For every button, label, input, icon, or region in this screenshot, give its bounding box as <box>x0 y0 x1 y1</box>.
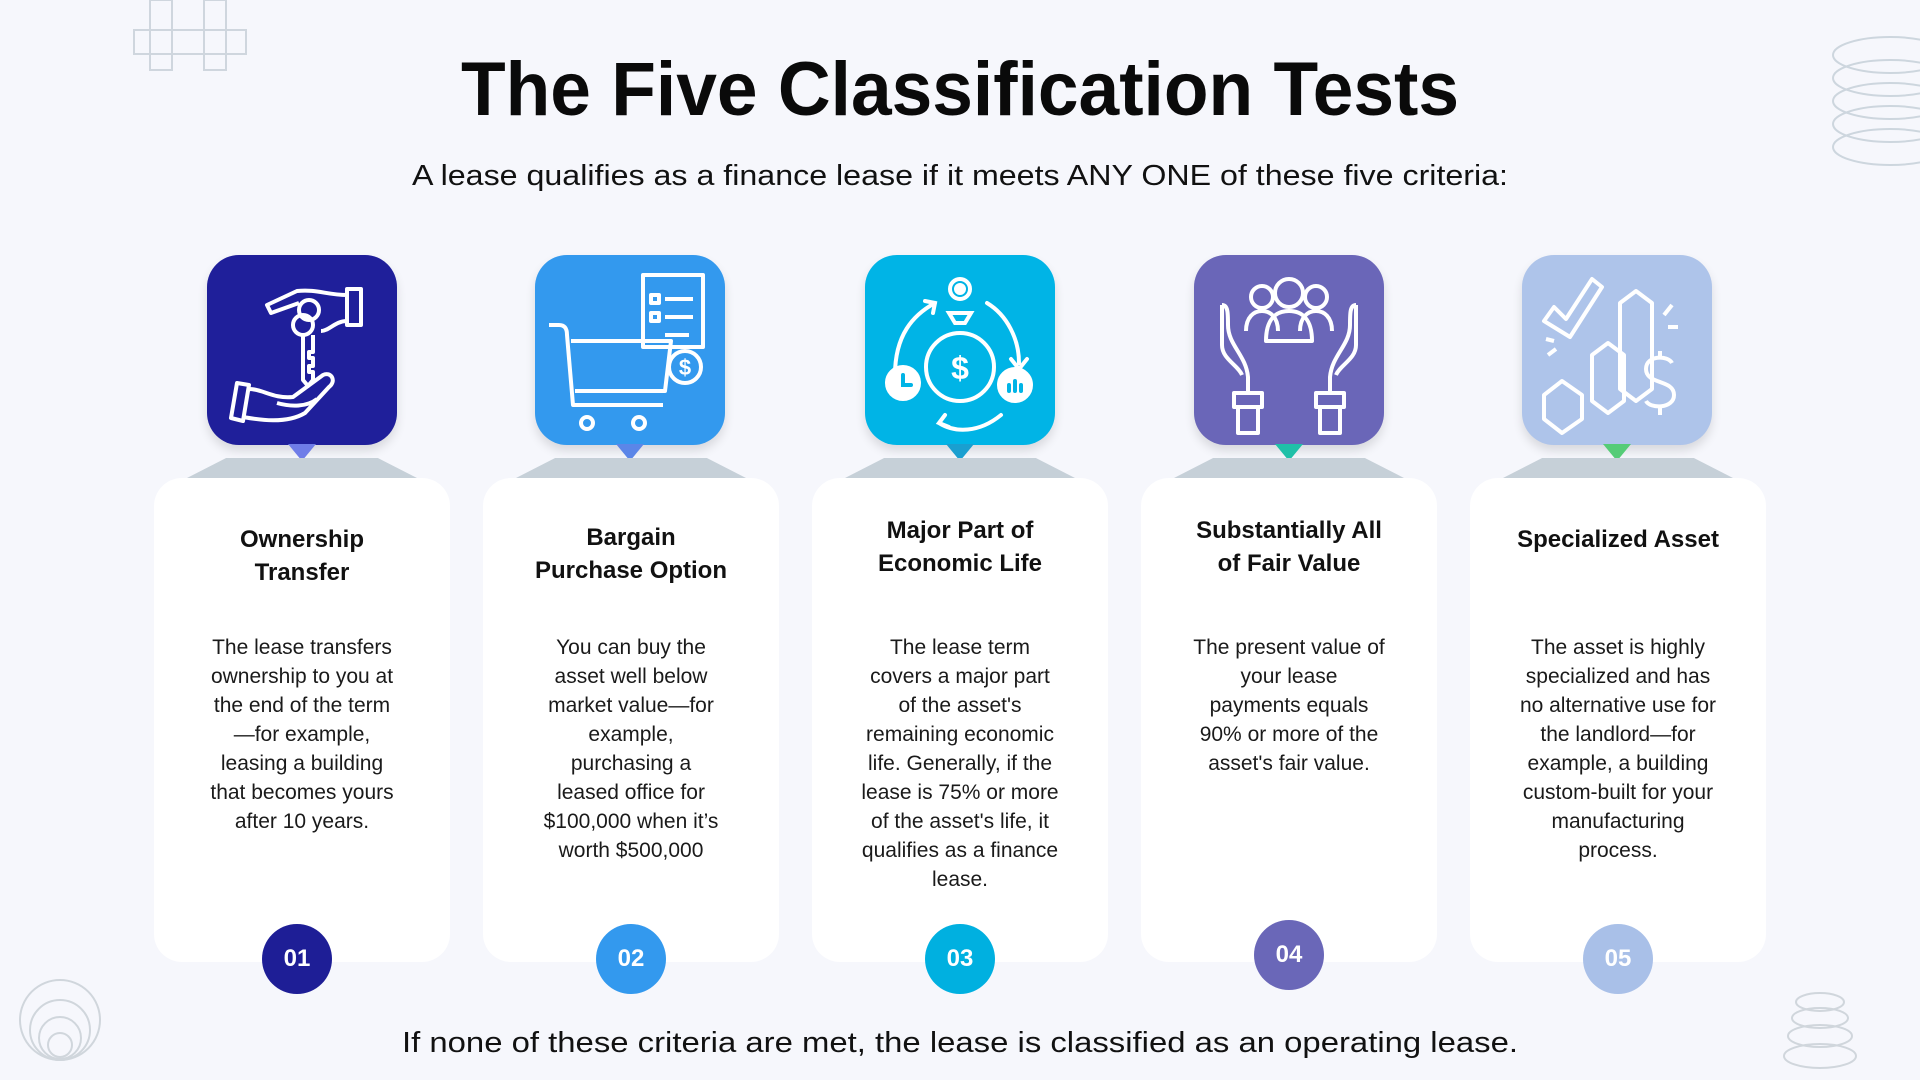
icon: key handover <box>207 255 397 445</box>
icon: cart: $ <box>679 355 691 380</box>
card text: of the asset's <box>898 694 1022 717</box>
card text: asset's fair value. <box>1208 752 1370 775</box>
card title <box>240 526 364 586</box>
card text: after 10 years. <box>235 810 369 833</box>
card text: leased office for <box>557 781 705 804</box>
panel 3: major part of economic life <box>812 255 1108 994</box>
card text: no alternative use for <box>1520 694 1716 717</box>
decoration: rings right <box>1832 36 1920 166</box>
card text <box>1193 636 1385 775</box>
icon: money cycle <box>865 255 1055 445</box>
card text <box>1520 636 1716 862</box>
card title: Specialized Asset <box>1517 526 1719 553</box>
card text: the landlord—for <box>1540 723 1696 746</box>
card text: $100,000 when it’s <box>544 810 718 833</box>
card title: of Fair Value <box>1218 550 1360 577</box>
card title: Economic Life <box>878 550 1042 577</box>
panel 2: bargain purchase option <box>483 255 779 994</box>
card text: You can buy the <box>556 636 706 659</box>
card <box>1141 478 1437 962</box>
card title <box>535 524 727 584</box>
card title: Substantially All <box>1196 517 1382 544</box>
decoration: circles bottom-left <box>19 979 101 1061</box>
panel 1: ownership transfer <box>154 255 450 994</box>
footer note: If none of these criteria are met, the lease is classified as an operating lease. <box>402 1027 1518 1059</box>
card text <box>544 636 718 862</box>
card text: The asset is highly <box>1531 636 1705 659</box>
card text: covers a major part <box>870 665 1050 688</box>
number 01: 01 <box>284 945 310 972</box>
icon: money cycle: $ <box>951 350 969 386</box>
card text: The lease term <box>890 636 1030 659</box>
icon: hands with people <box>1194 255 1384 445</box>
card text: leasing a building <box>221 752 383 775</box>
card text <box>861 636 1059 891</box>
card title: Transfer <box>255 559 349 586</box>
decoration: grid <box>133 0 247 71</box>
decoration: stack bottom-right <box>1783 992 1857 1069</box>
card text: The present value of <box>1193 636 1385 659</box>
card text: market value—for <box>548 694 714 717</box>
number 04: 04 <box>1276 941 1302 968</box>
pointer <box>1603 444 1631 461</box>
card title: Ownership <box>240 526 364 553</box>
card text <box>210 636 394 833</box>
number 04 <box>1254 920 1324 990</box>
card text: payments equals <box>1210 694 1368 717</box>
icon: blocks and dollar <box>1522 255 1712 445</box>
card title: Purchase Option <box>535 557 727 584</box>
card <box>483 478 779 962</box>
card text: example, <box>588 723 674 746</box>
card text: life. Generally, if the <box>868 752 1052 775</box>
card text: asset well below <box>555 665 707 688</box>
title: The Five Classification Tests <box>461 47 1459 130</box>
card text: purchasing a <box>571 752 691 775</box>
card text: process. <box>1578 839 1658 862</box>
number 02 <box>596 924 666 994</box>
pointer <box>946 444 974 461</box>
card text: manufacturing <box>1551 810 1685 833</box>
card text: ownership to you at <box>211 665 393 688</box>
card text: of the asset's life, it <box>871 810 1049 833</box>
card <box>812 478 1108 962</box>
number 03: 03 <box>947 945 973 972</box>
card text: your lease <box>1241 665 1337 688</box>
number 05: 05 <box>1605 945 1631 972</box>
pointer <box>1275 444 1303 461</box>
card <box>154 478 450 962</box>
subtitle: A lease qualifies as a finance lease if it meets ANY ONE of these five criteria: <box>412 160 1508 192</box>
card title: Bargain <box>586 524 676 551</box>
number 03 <box>925 924 995 994</box>
card text: the end of the term <box>214 694 390 717</box>
card text: that becomes yours <box>210 781 394 804</box>
card title: Major Part of <box>887 517 1033 544</box>
card text: lease is 75% or more <box>861 781 1059 804</box>
card text: specialized and has <box>1526 665 1710 688</box>
card title <box>878 517 1042 577</box>
pointer <box>616 444 644 461</box>
card text: remaining economic <box>866 723 1054 746</box>
card text: example, a building <box>1528 752 1708 775</box>
pointer <box>288 444 316 461</box>
panel 4: substantially all of fair value <box>1141 255 1437 990</box>
number 02: 02 <box>618 945 644 972</box>
panel 5: specialized asset <box>1470 255 1766 994</box>
card text: worth $500,000 <box>559 839 703 862</box>
card text: The lease transfers <box>212 636 392 659</box>
card text: —for example, <box>234 723 370 746</box>
card text: 90% or more of the <box>1200 723 1378 746</box>
card title <box>1196 517 1382 577</box>
card text: qualifies as a finance <box>862 839 1058 862</box>
card text: custom-built for your <box>1523 781 1713 804</box>
card text: lease. <box>932 868 988 891</box>
number 01 <box>262 924 332 994</box>
card <box>1470 478 1766 962</box>
number 05 <box>1583 924 1653 994</box>
icon: cart <box>535 255 725 445</box>
